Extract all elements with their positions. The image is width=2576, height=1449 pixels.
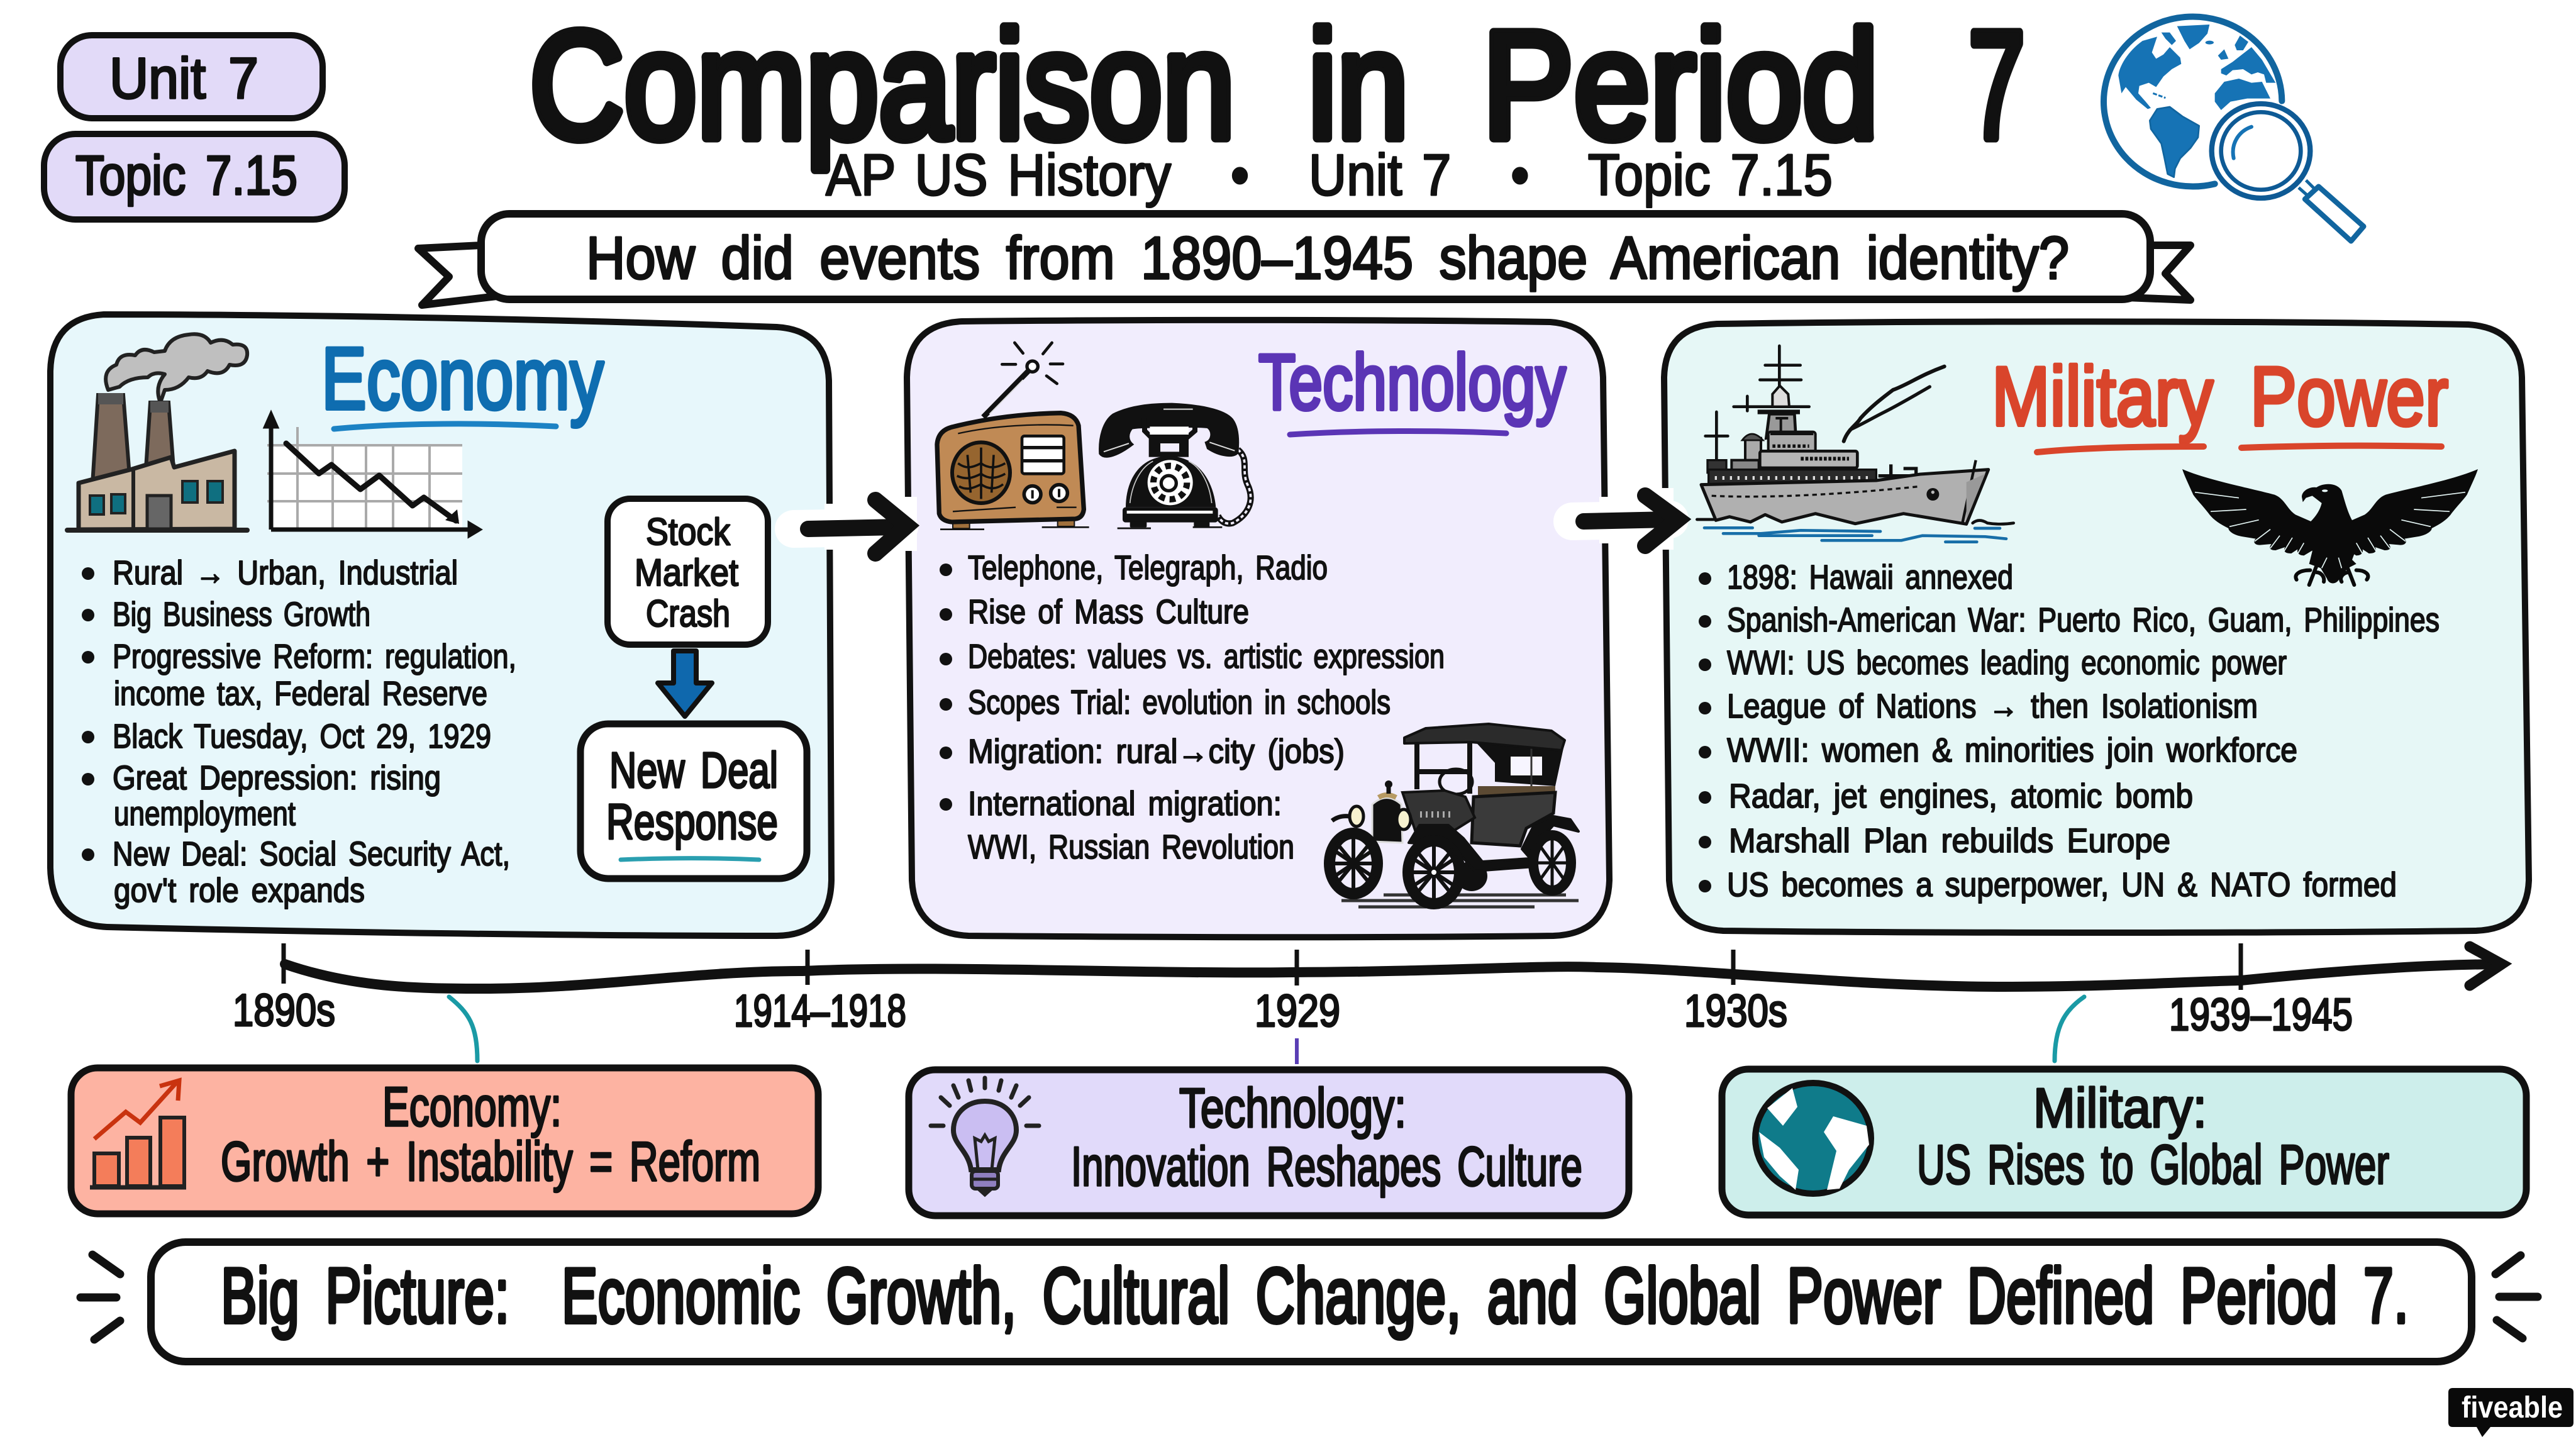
takeaway: Military: US Rises to Global Power xyxy=(1917,1133,2389,1196)
logo: fiveable: fiveable xyxy=(2462,1391,2563,1424)
takeaway: Military: Military: xyxy=(2033,1077,2207,1139)
date label: 1930s xyxy=(1684,986,1787,1036)
list: military bullets: Radar, jet engines, atomic bomb xyxy=(1729,777,2193,815)
connector: technology xyxy=(1295,1038,1299,1064)
icon: vintage car xyxy=(1330,724,1579,907)
badge: Topic 7.15: Topic 7.15 xyxy=(75,144,297,206)
question banner xyxy=(418,214,2190,305)
icon: rising bar chart xyxy=(90,1080,186,1187)
list: military bullets xyxy=(1699,558,2440,904)
icon: factory xyxy=(67,334,247,530)
list: military bullets: WWI: US becomes leading economic power xyxy=(1727,644,2287,682)
list: economy bullets: gov't role expands xyxy=(114,872,365,909)
icon: radio xyxy=(937,343,1089,530)
list: economy bullets: unemployment xyxy=(114,795,296,833)
badge: Topic 7.15 xyxy=(44,134,345,219)
icon: world globe xyxy=(1755,1083,1871,1194)
badge: Unit 7 xyxy=(60,35,323,118)
callout: Big Picture xyxy=(151,1242,2472,1362)
list: technology bullets: Telephone, Telegraph, Radio xyxy=(968,549,1328,587)
heading: Technology: Technology xyxy=(1258,339,1566,426)
box: New Deal Response: Response xyxy=(606,794,778,850)
list: technology bullets: WWI, Russian Revolution xyxy=(968,828,1294,866)
panel: Military Power xyxy=(1664,321,2529,933)
takeaway: Economy xyxy=(71,1068,818,1214)
date label: 1939–1945 xyxy=(2169,990,2353,1040)
box: Stock Market Crash: Stock xyxy=(646,511,731,553)
connector: military xyxy=(2055,997,2084,1061)
heading: Military Power: Military Power xyxy=(1992,350,2448,443)
list: economy bullets: Big Business Growth xyxy=(113,596,370,633)
box: Stock Market Crash: Crash xyxy=(646,592,730,635)
takeaway: Economy: Growth + Instability = Reform xyxy=(221,1130,760,1192)
list: technology bullets: Migration: rural→city (jobs) xyxy=(968,733,1345,770)
list: military bullets: Marshall Plan rebuilds Europe xyxy=(1729,822,2170,860)
icon: telephone xyxy=(1099,404,1251,528)
list: economy bullets: Rural → Urban, Industrial xyxy=(113,554,458,592)
icon: globe with magnifying glass xyxy=(2104,17,2363,241)
chart: falling line xyxy=(264,412,481,537)
panel: Technology xyxy=(907,320,1609,937)
title: Period xyxy=(1482,0,1879,170)
emphasis marks: left xyxy=(80,1255,120,1340)
list: economy bullets: New Deal: Social Security Act, xyxy=(113,835,510,873)
connector: economy xyxy=(449,997,477,1061)
takeaway: Technology: Technology: xyxy=(1179,1077,1406,1139)
date label: 1929 xyxy=(1255,986,1340,1036)
list: economy bullets: income tax, Federal Reserve xyxy=(114,675,487,713)
title: in xyxy=(1308,0,1409,170)
box: New Deal Response: New Deal xyxy=(609,742,778,798)
icon: eagle xyxy=(2182,469,2478,585)
list: technology bullets xyxy=(940,549,1445,866)
list: military bullets: League of Nations → then Isolationism xyxy=(1727,687,2258,725)
box: Stock Market Crash: Market xyxy=(635,552,738,594)
arrow: Technology to Military xyxy=(1572,488,1678,550)
list: economy bullets: Black Tuesday, Oct 29, 1929 xyxy=(113,718,491,755)
takeaway: Technology: Innovation Reshapes Culture xyxy=(1071,1135,1582,1197)
box: New Deal Response xyxy=(580,724,807,879)
list: technology bullets: Rise of Mass Culture xyxy=(968,593,1249,631)
list: military bullets: WWII: women & minorities join workforce xyxy=(1727,731,2297,769)
arrow: Economy to Technology xyxy=(794,497,910,553)
icon: light bulb xyxy=(931,1078,1039,1195)
takeaway: Military xyxy=(1722,1069,2526,1215)
emphasis marks: right xyxy=(2496,1255,2538,1338)
subtitle: AP US History • Unit 7 • Topic 7.15 xyxy=(826,142,1833,208)
question banner: How did events from 1890–1945 shape American identity? xyxy=(586,225,2069,292)
arrow: crash to New Deal xyxy=(658,651,712,716)
list: military bullets: US becomes a superpower, UN & NATO formed xyxy=(1727,866,2397,904)
title: 7 xyxy=(1968,0,2025,170)
title: Comparison xyxy=(530,0,1235,170)
date label: 1914–1918 xyxy=(734,986,906,1036)
badge: Unit 7: Unit 7 xyxy=(109,47,258,111)
list: military bullets: Spanish-American War: Puerto Rico, Guam, Philippines xyxy=(1727,601,2440,639)
list: technology bullets: Debates: values vs. artistic expression xyxy=(968,638,1445,675)
title xyxy=(530,0,2025,170)
logo: fiveable xyxy=(2448,1388,2573,1437)
box: Stock Market Crash xyxy=(608,499,768,645)
panel: Economy xyxy=(50,314,831,936)
takeaway: Economy: Economy: xyxy=(382,1075,562,1138)
takeaway: Technology xyxy=(909,1070,1629,1216)
list: military bullets: 1898: Hawaii annexed xyxy=(1727,558,2013,596)
date label: 1890s xyxy=(233,985,335,1036)
icon: battleship xyxy=(1697,346,2014,542)
heading: Economy: Economy xyxy=(321,329,604,428)
timeline xyxy=(233,943,2502,1040)
list: technology bullets: Scopes Trial: evolution in schools xyxy=(968,684,1391,721)
list: economy bullets: Great Depression: rising xyxy=(113,759,441,797)
list: technology bullets: International migration: xyxy=(968,785,1282,823)
list: economy bullets xyxy=(82,554,516,909)
list: economy bullets: Progressive Reform: regulation, xyxy=(113,638,516,675)
